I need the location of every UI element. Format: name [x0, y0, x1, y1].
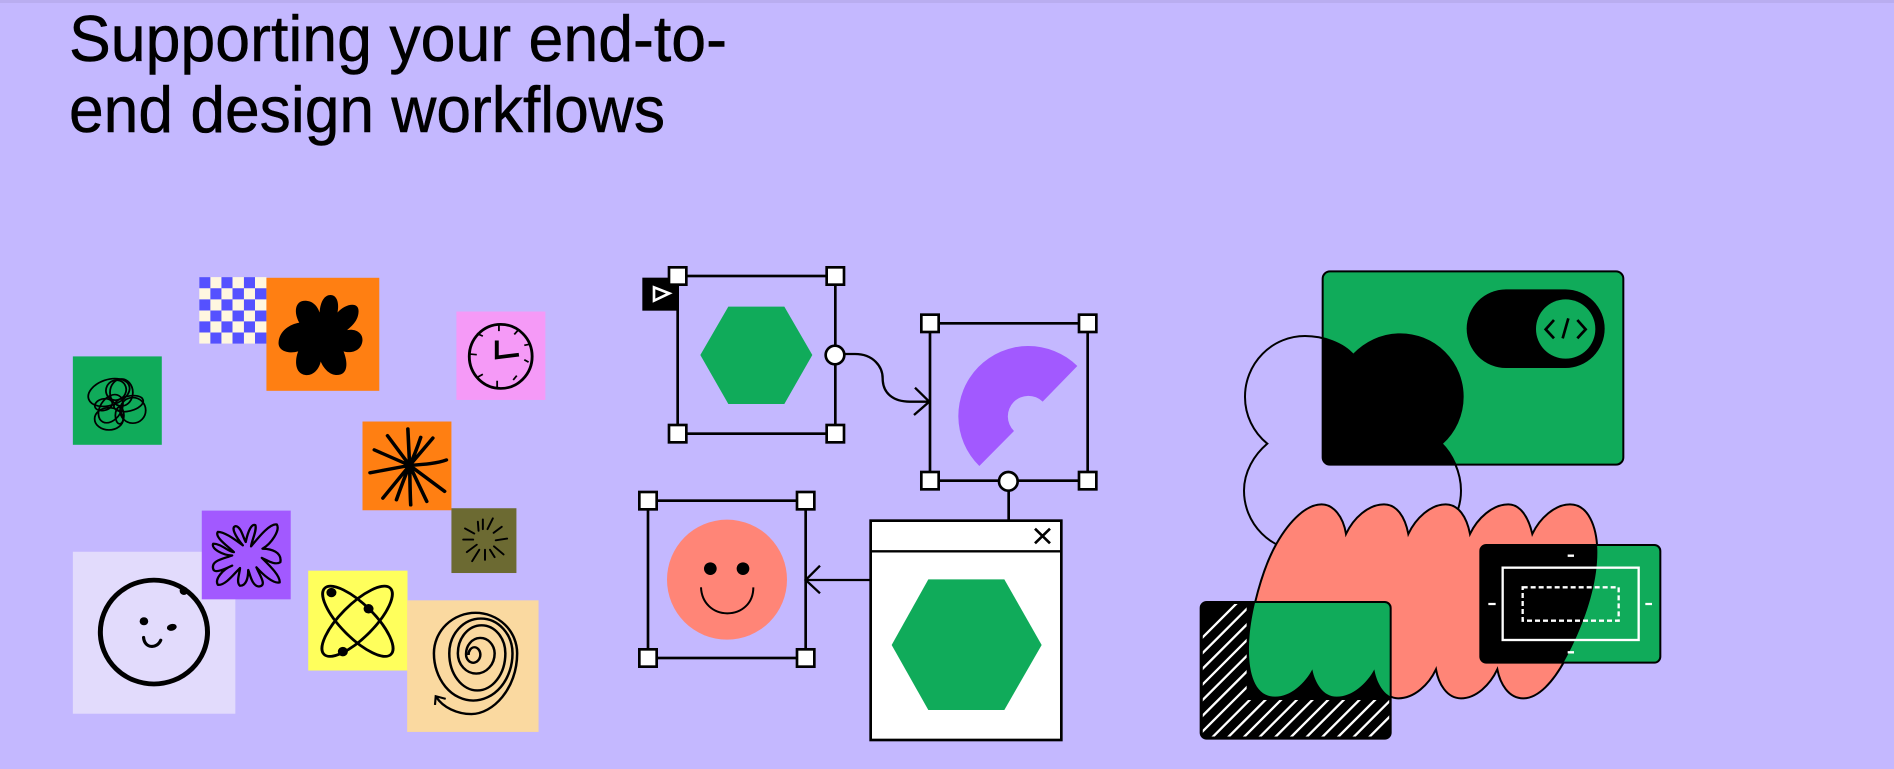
purple note with outline flower — [202, 511, 291, 599]
frame with green hexagon — [669, 267, 844, 442]
frame with smiley — [639, 492, 814, 667]
orange note with black flower — [266, 278, 379, 391]
yellow note with atom — [308, 571, 407, 671]
hatched card with green overlap — [1200, 601, 1392, 740]
title: Supporting your end-to- — [69, 2, 727, 75]
connector curve arrow — [845, 354, 929, 415]
connector arrow to smiley frame — [806, 566, 871, 593]
panel: sticky notes with doodles — [73, 277, 545, 732]
frame with purple arc — [921, 315, 1096, 491]
green note with scribble — [73, 356, 162, 445]
lilac note with smiley — [73, 552, 235, 714]
panel: developer handoff shapes — [1200, 270, 1662, 740]
title: end design workflows — [69, 73, 665, 146]
window with hexagon — [871, 521, 1061, 740]
cloud outline — [1244, 334, 1463, 551]
checkerboard tile — [199, 277, 266, 344]
title — [69, 2, 727, 146]
green card — [1323, 271, 1623, 465]
olive note with sunburst — [451, 508, 516, 573]
code toggle — [1467, 289, 1605, 368]
peach note with spiral arrow — [407, 600, 539, 732]
pink note with clock — [456, 312, 545, 400]
black cloud overlap — [1324, 335, 1462, 464]
coral scalloped blob — [1249, 504, 1597, 698]
orange note with starburst — [362, 422, 451, 510]
panel: prototyping frames and connectors — [639, 267, 1096, 740]
small green card with frames — [1479, 544, 1662, 664]
play tag — [642, 278, 678, 311]
connector line to window — [1005, 490, 1013, 521]
